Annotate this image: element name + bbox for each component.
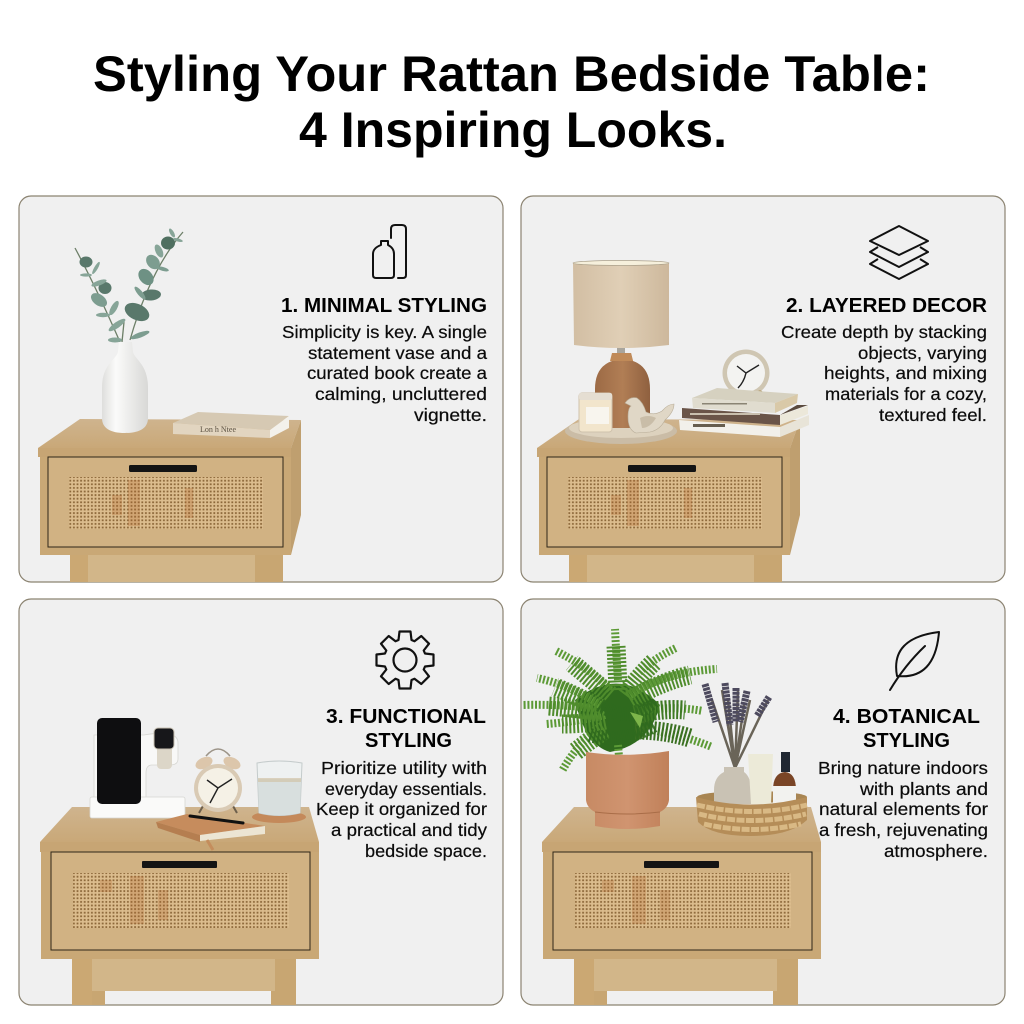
leather notebook with pen: [156, 814, 265, 850]
candle: [579, 393, 612, 432]
panel text: botanical styling: [818, 632, 988, 861]
panel text: botanical styling: with plants and: [859, 779, 988, 799]
twin-bell alarm clock: [194, 749, 242, 813]
panel text: minimal styling: statement vase and a: [308, 343, 487, 363]
panel text: functional styling: [316, 632, 487, 861]
panel text: functional styling: Keep it organized for: [316, 799, 487, 819]
panel text: botanical styling: STYLING: [863, 730, 950, 752]
panel text: botanical styling: Bring nature indoors: [818, 758, 988, 778]
panel text: functional styling: everyday essentials.: [325, 779, 487, 799]
serum bottle: [773, 752, 796, 804]
ceramic bud vase: [714, 767, 751, 804]
panel text: layered decor: Create depth by stacking: [781, 322, 987, 342]
panel: botanical styling: [521, 599, 1005, 1005]
charging stand with phone and watch: [90, 718, 185, 818]
panel text: layered decor: 2. LAYERED DECOR: [786, 295, 988, 317]
panel text: minimal styling: Simplicity is key. A single: [282, 322, 487, 342]
panel text: layered decor: textured feel.: [879, 405, 987, 425]
alarm clock on books: [722, 350, 770, 398]
lamp: [573, 260, 669, 428]
icon: stacked layers: [870, 226, 928, 279]
panel: minimal styling: [19, 196, 503, 582]
white vase: [102, 342, 148, 433]
panel text: minimal styling: calming, uncluttered: [315, 384, 487, 404]
panel text: layered decor: materials for a cozy,: [825, 384, 987, 404]
nightstand 1: [38, 419, 301, 582]
icon: leaf: [890, 632, 939, 690]
icon: gear: [376, 632, 434, 688]
panel text: functional styling: bedside space.: [365, 841, 487, 861]
nightstand 4: [542, 807, 821, 1005]
panel text: minimal styling: [281, 225, 487, 425]
panel text: layered decor: objects, varying: [858, 343, 987, 363]
terracotta pot: [586, 751, 669, 829]
panel text: botanical styling: a fresh, rejuvenating: [819, 820, 988, 840]
panel: layered decor: [521, 196, 1005, 582]
nightstand 3: [40, 807, 319, 1005]
eucalyptus stems: [75, 228, 183, 342]
book: Lon h Ntee: [200, 425, 236, 434]
icon: bottles: [373, 225, 406, 278]
panel text: functional styling: a practical and tidy: [331, 820, 487, 840]
tray: [565, 418, 677, 444]
panel text: functional styling: Prioritize utility with: [321, 758, 487, 778]
nightstand 2: [537, 419, 800, 582]
woven basket: [696, 797, 807, 836]
panel text: minimal styling: curated book create a: [307, 363, 487, 383]
title: 4 Inspiring Looks.: [299, 102, 727, 158]
lavender: [705, 683, 769, 768]
woven basket back: [697, 791, 807, 803]
panel text: minimal styling: 1. MINIMAL STYLING: [281, 295, 487, 317]
glass of water on coaster: [252, 761, 306, 823]
panel text: botanical styling: 4. BOTANICAL: [833, 706, 980, 728]
title: [93, 46, 930, 158]
panel text: minimal styling: vignette.: [414, 405, 487, 425]
title: Styling Your Rattan Bedside Table:: [93, 46, 930, 102]
ceramic bird: [625, 398, 674, 433]
panel text: botanical styling: natural elements for: [819, 799, 988, 819]
panel text: layered decor: heights, and mixing: [824, 363, 987, 383]
panel text: layered decor: [781, 226, 988, 425]
panel text: botanical styling: atmosphere.: [884, 841, 988, 861]
fern: [522, 629, 717, 771]
panel: functional styling: [19, 599, 503, 1005]
panel text: functional styling: STYLING: [365, 730, 452, 752]
book stack: [679, 388, 809, 437]
book: [173, 412, 289, 438]
cream tube: [748, 754, 773, 804]
panel text: functional styling: 3. FUNCTIONAL: [326, 706, 486, 728]
